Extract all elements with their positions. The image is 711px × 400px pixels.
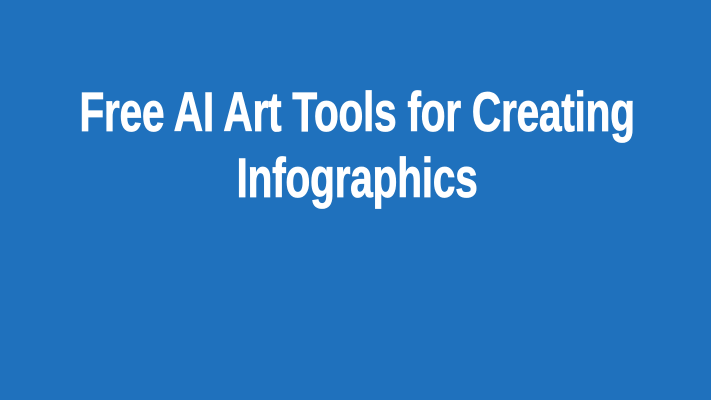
title [79,80,635,209]
title: Free AI Art Tools for Creating [79,80,635,143]
title: Infographics [237,146,477,209]
